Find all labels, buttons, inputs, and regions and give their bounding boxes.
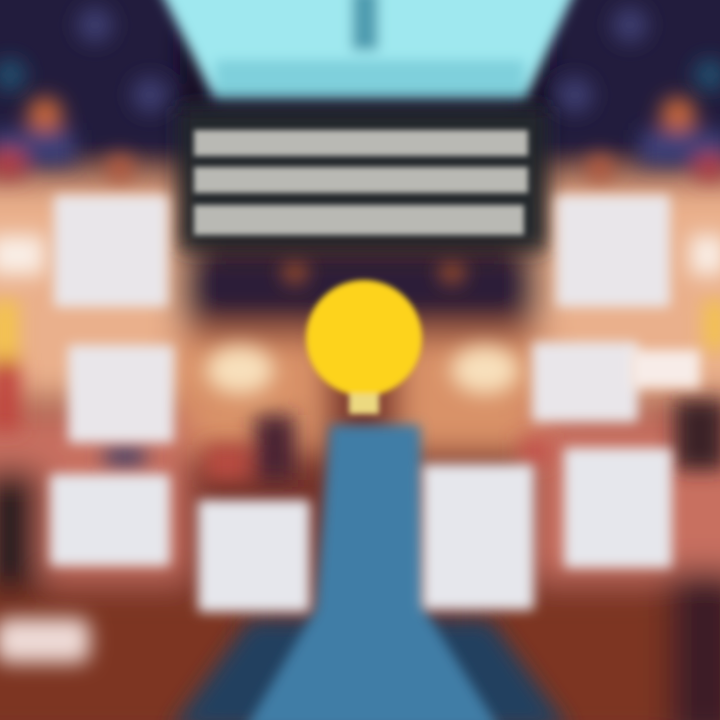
blue central carpet [170,425,570,720]
card: centre left [198,500,310,612]
lightbulb icon [306,280,422,414]
card: left top [54,195,168,307]
side decorations [0,97,720,663]
card: right top [556,195,670,307]
card: right bottom [564,448,672,568]
title panel [178,106,548,252]
card: right middle [532,342,638,422]
card: centre right [422,464,534,610]
card: left bottom [50,474,170,566]
white banner: right middle [630,350,700,388]
title text lines [194,130,528,235]
card: left middle [68,345,174,443]
dark ceiling blotches [0,7,720,113]
skylight ceiling [155,0,580,100]
